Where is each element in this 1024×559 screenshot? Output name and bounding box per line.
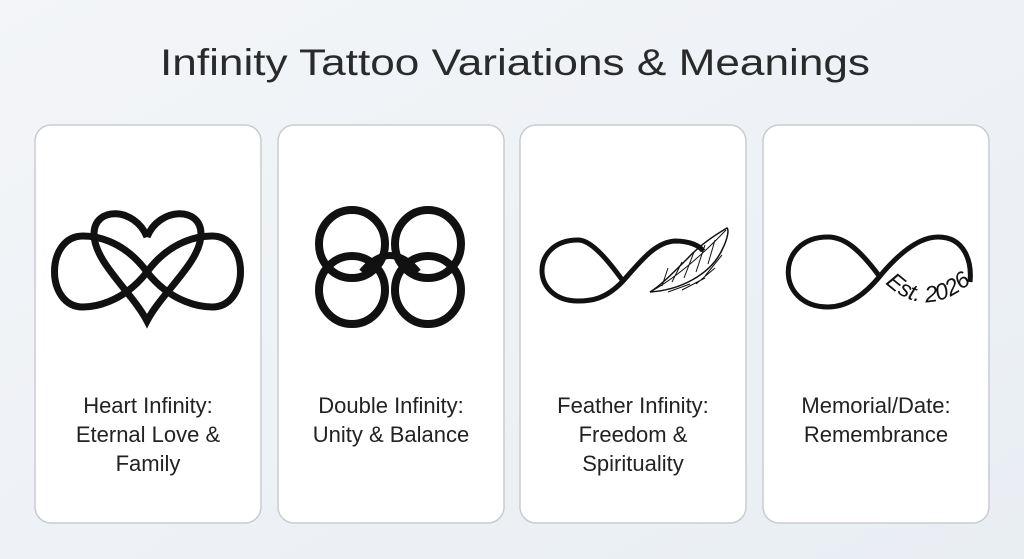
panel: double infinity: Unity & Balance — [313, 422, 469, 447]
label: heart: Heart Infinity: — [83, 393, 213, 418]
panel: memorial infinity — [762, 124, 990, 524]
label: double: Double Infinity: — [318, 393, 464, 418]
icon: double infinity — [319, 210, 461, 324]
panel: memorial infinity: Remembrance — [804, 422, 948, 447]
icon: heart infinity — [54, 214, 240, 321]
panel: heart infinity: Family — [116, 451, 180, 476]
icon: memorial infinity — [786, 234, 973, 310]
title: Infinity Tattoo Variations & Meanings — [160, 42, 870, 83]
icon: memorial infinity: Est. 2026 — [886, 271, 968, 303]
panel: double infinity — [278, 125, 504, 523]
panel: heart infinity — [35, 125, 261, 523]
panel: heart infinity: Eternal Love & — [76, 422, 220, 447]
panel: feather infinity — [520, 125, 746, 523]
panel: feather infinity: Spirituality — [582, 451, 684, 476]
label: memorial: Memorial/Date: — [801, 393, 951, 418]
panel: feather infinity: Freedom & — [579, 422, 688, 447]
icon: feather infinity — [542, 228, 728, 301]
label: feather: Feather Infinity: — [557, 393, 709, 418]
